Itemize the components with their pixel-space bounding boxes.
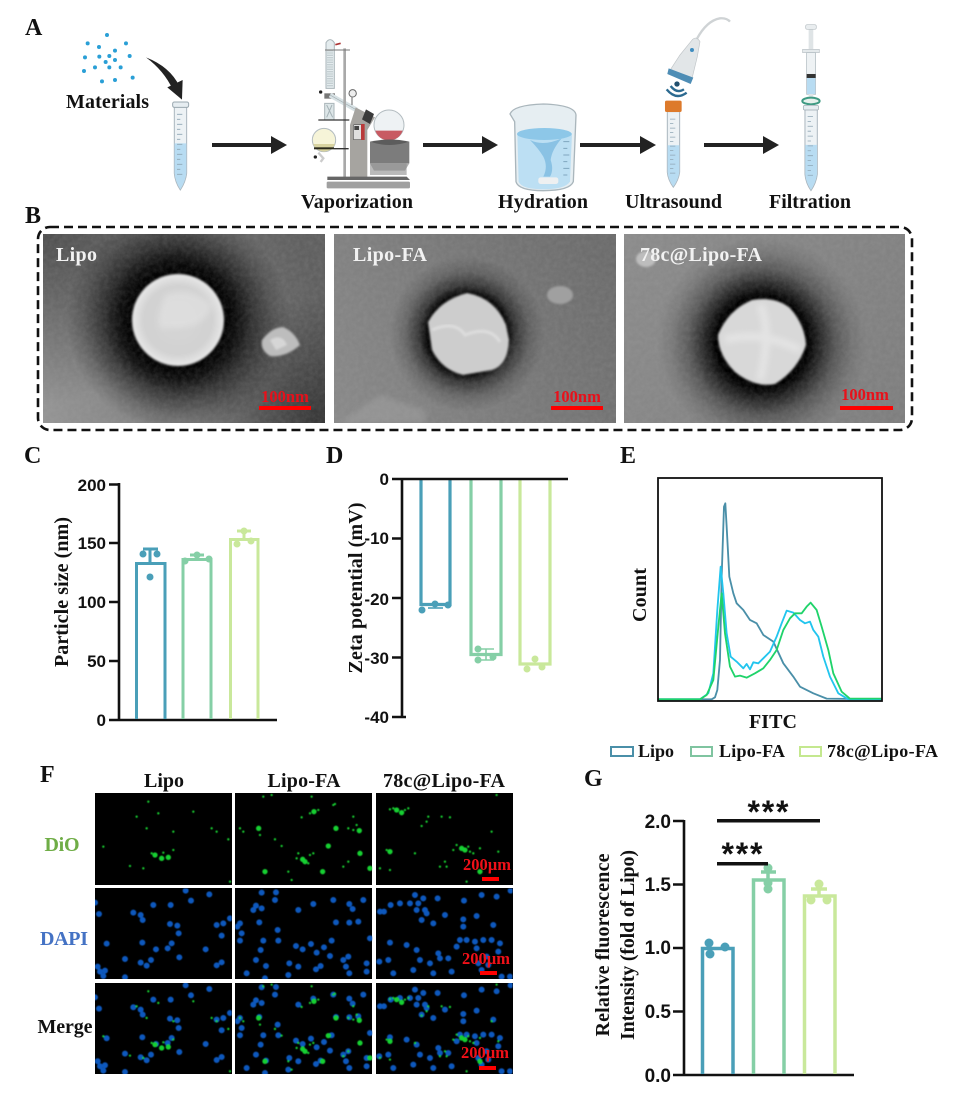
TEM image: Lipo-FA	[334, 234, 616, 423]
icon: syringe filter and tube	[802, 25, 820, 191]
TEM image: Lipo	[43, 234, 325, 423]
y axis title: Intensity (fold of Lipo)	[617, 850, 639, 1040]
tick labels: 1.5	[645, 875, 671, 896]
bar: 78c@Lipo-FA	[804, 880, 835, 1074]
row title Merge: Merge	[38, 1016, 93, 1038]
bar: 78c@Lipo-FA	[230, 528, 258, 719]
panel label F: F	[40, 762, 55, 788]
scale bar 1: 100nm	[261, 387, 309, 406]
tick labels: 200	[78, 476, 106, 495]
tick labels: 150	[78, 534, 106, 553]
image title: 78c@Lipo-FA: 78c@Lipo-FA	[640, 244, 763, 266]
panel B: TEM images	[25, 203, 912, 430]
micrograph grid	[95, 793, 513, 1074]
scale bar DAPI row: 200µm	[462, 949, 510, 968]
bar: Lipo-FA	[182, 552, 212, 719]
row title DiO: DiO	[44, 834, 80, 856]
tick labels: -20	[364, 590, 389, 609]
panel label B: B	[25, 203, 41, 229]
column title Lipo-FA: Lipo-FA	[268, 770, 341, 792]
image title: Lipo-FA: Lipo-FA	[353, 244, 428, 266]
panel label A: A	[25, 15, 43, 41]
tick labels: -30	[364, 649, 389, 668]
bar: Lipo-FA	[754, 864, 784, 1074]
image title: Lipo: Lipo	[56, 244, 97, 266]
tick labels: 2.0	[645, 812, 671, 833]
curved arrow into tube	[146, 57, 183, 100]
tick labels: -10	[364, 529, 389, 548]
materials label: Materials	[66, 91, 149, 113]
tick labels: 50	[87, 652, 106, 671]
bar: Lipo	[418, 480, 452, 614]
scale bar 3	[840, 385, 893, 410]
arrow 2	[423, 136, 498, 154]
y axis title: Particle size (nm)	[51, 517, 73, 667]
filtration label: Filtration	[769, 191, 851, 213]
panel label G: G	[584, 766, 603, 792]
scale bar DiO row: 200µm	[463, 855, 511, 874]
significance bracket top: ***	[748, 794, 789, 830]
legend	[611, 741, 938, 761]
row title DAPI: DAPI	[40, 928, 88, 950]
tick labels	[645, 812, 671, 1087]
tick labels: 0	[380, 470, 389, 489]
scale bar 2: 100nm	[553, 387, 601, 406]
bar: 78c@Lipo-FA	[520, 480, 550, 672]
TEM image: 78c@Lipo-FA	[624, 234, 905, 423]
y axis title: Relative fluorescence	[592, 853, 614, 1036]
legend: Lipo-FA	[719, 741, 785, 761]
tick labels: 0.0	[645, 1066, 671, 1087]
scale bar Merge row: 200µm	[461, 1043, 509, 1062]
axes	[673, 820, 854, 1076]
x axis title: FITC	[749, 711, 797, 733]
icon: materials particles	[82, 33, 135, 83]
y axis title: Zeta potential (mV)	[345, 502, 367, 674]
arrow 3	[580, 136, 656, 154]
panel label E: E	[620, 443, 636, 469]
significance bracket top	[717, 794, 820, 830]
column title Lipo: Lipo	[144, 770, 184, 792]
panel C: particle size bar chart	[24, 443, 277, 730]
ultrasound label: Ultrasound	[625, 191, 722, 213]
panel G: relative fluorescence bar chart	[584, 766, 854, 1087]
panel E: flow cytometry histogram	[611, 443, 938, 761]
tick labels: 0.5	[645, 1002, 671, 1023]
tick labels: -40	[364, 708, 389, 727]
vaporization label: Vaporization	[301, 191, 413, 213]
icon: rotary evaporator	[312, 40, 410, 188]
icon: beaker with vortex	[510, 104, 576, 191]
tick labels: 100	[78, 593, 106, 612]
bar: Lipo	[702, 938, 733, 1074]
panel F: fluorescence micrographs	[38, 762, 513, 1074]
axes	[109, 483, 277, 720]
arrow 1	[212, 136, 287, 154]
panel A: preparation workflow	[25, 15, 851, 213]
panel label D: D	[326, 443, 343, 469]
panel label C: C	[24, 443, 41, 469]
dashed border	[38, 227, 912, 430]
arrow 4	[704, 136, 779, 154]
panel D: zeta potential bar chart	[326, 443, 568, 727]
plot frame	[658, 478, 882, 701]
icon: starting tube	[173, 102, 189, 190]
bar: Lipo-FA	[471, 480, 501, 664]
tick labels: 1.0	[645, 938, 671, 959]
column title 78c@Lipo-FA: 78c@Lipo-FA	[383, 770, 506, 792]
icon: ultrasound probe and tube	[665, 18, 730, 187]
legend: 78c@Lipo-FA	[827, 741, 938, 761]
bar: Lipo	[136, 549, 165, 719]
y axis title	[592, 850, 639, 1040]
tick labels	[78, 476, 106, 730]
axes	[392, 479, 568, 718]
significance bracket lower: ***	[722, 836, 763, 872]
histogram curves	[658, 503, 882, 699]
scale bar 3: 100nm	[841, 385, 889, 404]
legend: Lipo	[638, 741, 674, 761]
y axis title: Count	[629, 568, 651, 622]
hydration label: Hydration	[498, 191, 588, 213]
tick labels: 0	[97, 711, 106, 730]
tick labels	[364, 470, 389, 727]
